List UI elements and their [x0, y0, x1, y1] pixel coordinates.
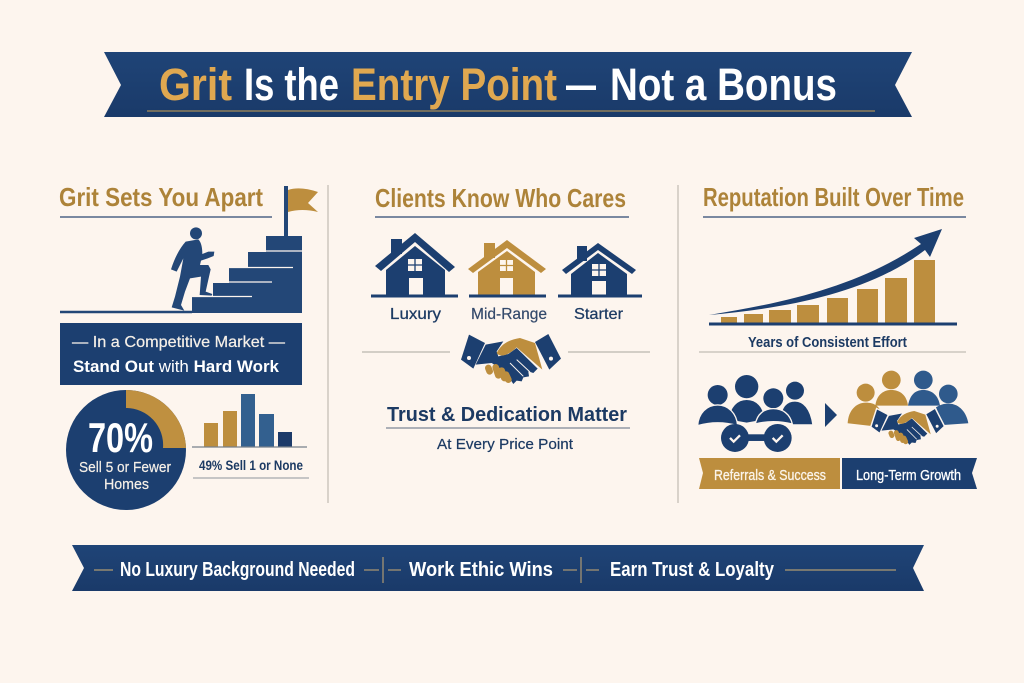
heading: grit sets you apart: Grit Sets You Apart: [59, 182, 263, 212]
arrow: growth trend: [709, 229, 942, 315]
label: mid-range: Mid-Range: [471, 306, 547, 323]
title banner: [104, 52, 912, 117]
stat: 49 percent: 49% Sell 1 or None: [199, 457, 303, 473]
chart: 70 percent donut: 70%: [88, 414, 153, 461]
chart: small bar chart: [192, 394, 307, 447]
label: starter: Starter: [574, 306, 624, 323]
title text: Grit: [159, 59, 232, 110]
stat: 49 percent: [193, 457, 309, 478]
callout: competitive market: Stand Out with Hard Work: [73, 357, 280, 376]
text: at every price point: At Every Price Point: [437, 436, 574, 453]
icon: luxury house: [371, 233, 458, 296]
chart: 70 percent donut: Homes: [104, 476, 149, 493]
panel: clients know who cares: [362, 183, 650, 453]
label: years of consistent effort: Years of Consistent Effort: [748, 335, 907, 351]
icon: growing group with handshake: [848, 371, 968, 445]
chart: 70 percent donut: Sell 5 or Fewer: [79, 459, 171, 476]
ribbon: long-term growth: Long-Term Growth: [856, 467, 961, 484]
callout: competitive market: — In a Competitive Market —: [72, 334, 285, 351]
text: trust and dedication matter: Trust & Dedication Matter: [387, 404, 627, 426]
icon: staircase: [60, 236, 302, 313]
text: no luxury background needed: No Luxury Background Needed: [120, 559, 355, 581]
panel: grit sets you apart: [59, 182, 318, 510]
text: earn trust and loyalty: Earn Trust & Loyalty: [610, 559, 775, 581]
bottom banner: [72, 545, 924, 591]
chart: rising bars: [721, 260, 935, 323]
panel: reputation built over time: [698, 182, 977, 489]
title text: Entry Point: [351, 59, 557, 110]
title text: —: [566, 59, 596, 110]
chart: 70 percent donut: [66, 390, 186, 510]
callout: competitive market: [60, 323, 302, 385]
icon: starter house: [558, 243, 642, 296]
ribbon: referrals and success: [699, 458, 840, 489]
label: luxury: Luxury: [390, 306, 441, 323]
icon: mid-range house: [468, 240, 546, 296]
icon: flag: [284, 186, 318, 236]
text: work ethic wins: Work Ethic Wins: [409, 559, 553, 581]
title text: Is the: [244, 59, 339, 110]
icon: climbing person: [171, 227, 214, 311]
icon: handshake: [461, 334, 561, 384]
icon: referral group: [698, 375, 813, 452]
title text: [159, 59, 837, 110]
icon: linked checkmarks: [721, 424, 792, 452]
arrow: triangle: [825, 403, 837, 427]
ribbon: referrals and success: Referrals & Success: [714, 467, 826, 484]
heading: clients know who cares: Clients Know Who Cares: [375, 183, 626, 213]
icon: small handshake: [871, 408, 945, 445]
title text: Not a Bonus: [610, 59, 837, 110]
ribbon: long-term growth: [842, 458, 977, 489]
